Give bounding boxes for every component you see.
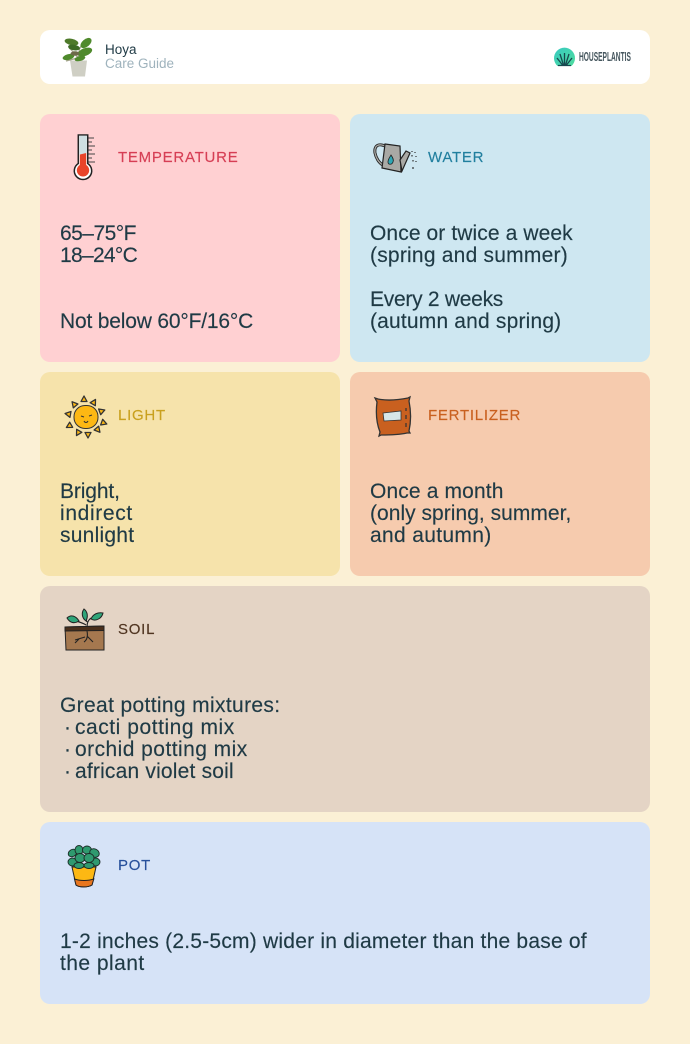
title: Hoya Care Guide: Care Guide <box>105 56 174 70</box>
logo: Houseplantis: HOUSEPLANTIS <box>579 50 631 64</box>
text: potting mixtures list <box>60 694 280 783</box>
text: potting mixtures list: orchid potting mix <box>75 738 248 761</box>
logo: Houseplantis <box>554 48 631 66</box>
text: pot size: 1-2 inches (2.5-5cm) wider in diameter than the base of <box>60 930 587 953</box>
title: Hoya Care Guide <box>105 42 174 70</box>
text: fertilizer schedule <box>370 480 571 547</box>
text: temperature range <box>60 222 137 267</box>
text: potting mixtures list: african violet soil <box>75 760 234 783</box>
text: potting mixtures list: · <box>64 716 71 739</box>
panel: fertilizer <box>350 372 650 576</box>
text: spring and summer watering: Once or twice a week <box>370 222 573 245</box>
text: temperature range: 65–75°F <box>60 222 136 245</box>
text: potting mixtures list: Great potting mixtures: <box>60 694 280 717</box>
text: autumn watering: (autumn and spring) <box>370 310 561 333</box>
panel: light <box>40 372 340 576</box>
heading: pot: POT <box>118 857 151 874</box>
text: light requirements <box>60 480 134 547</box>
heading: soil: SOIL <box>118 621 155 638</box>
text: spring and summer watering: (spring and summer) <box>370 244 568 267</box>
icon: watering can <box>373 143 417 173</box>
icon: sun <box>64 395 108 439</box>
text: potting mixtures list: · <box>64 738 71 761</box>
text: temperature range: 18–24°C <box>60 244 137 267</box>
text: pot size <box>60 930 587 975</box>
heading: temperature: TEMPERATURE <box>118 149 238 166</box>
icon: soil with seedling <box>64 608 104 650</box>
text: fertilizer schedule: (only spring, summer, <box>370 502 571 525</box>
text: potting mixtures list: · <box>64 760 71 783</box>
text: light requirements: indirect <box>60 502 133 525</box>
icon: potted hoya plant <box>62 38 92 76</box>
text: light requirements: sunlight <box>60 524 134 547</box>
title: Hoya Care Guide: Hoya <box>105 42 137 57</box>
panel: soil <box>40 586 650 812</box>
text: minimum temperature: Not below 60°F/16°C <box>60 310 253 333</box>
icon: potted plant <box>68 845 100 888</box>
header bar <box>40 30 650 84</box>
text: spring and summer watering <box>370 222 573 267</box>
text: autumn watering: Every 2 weeks <box>370 288 503 311</box>
icon: thermometer <box>74 134 95 180</box>
text: autumn watering <box>370 288 561 333</box>
panel: water <box>350 114 650 362</box>
panel: pot <box>40 822 650 1004</box>
icon: fertilizer bag <box>374 396 412 438</box>
text: pot size: the plant <box>60 952 145 975</box>
panel: temperature <box>40 114 340 362</box>
heading: water: WATER <box>428 149 484 166</box>
text: fertilizer schedule: Once a month <box>370 480 504 503</box>
heading: light: LIGHT <box>118 407 166 424</box>
text: light requirements: Bright, <box>60 480 120 503</box>
text: fertilizer schedule: and autumn) <box>370 524 492 547</box>
text: potting mixtures list: cacti potting mix <box>75 716 235 739</box>
heading: fertilizer: FERTILIZER <box>428 407 521 424</box>
